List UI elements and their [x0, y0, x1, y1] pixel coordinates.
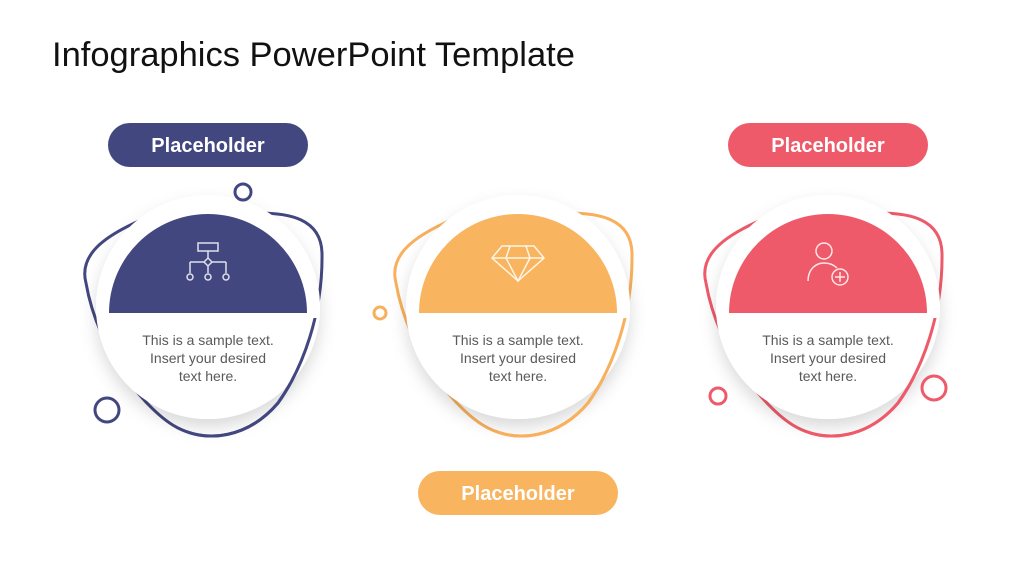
pill: bottom [418, 471, 618, 515]
text: text here. [489, 368, 547, 384]
title: Infographics PowerPoint Template [52, 36, 575, 74]
white circle [96, 195, 320, 419]
half disc [419, 214, 617, 313]
text: This is a sample text. [762, 332, 894, 348]
pill: bottom: Placeholder [461, 483, 575, 505]
text: Insert your desired [770, 350, 886, 366]
icon: hierarchy [187, 243, 229, 280]
icon: diamond [492, 246, 544, 281]
white circle [716, 195, 940, 419]
card: middle [395, 195, 632, 436]
pill: left [108, 123, 308, 167]
blob outline [395, 209, 632, 436]
half disc [109, 214, 307, 313]
decorative circles [95, 184, 946, 422]
blob outline [85, 209, 322, 436]
pill: right [728, 123, 928, 167]
text: This is a sample text. [452, 332, 584, 348]
card: left [85, 195, 322, 436]
pill: right: Placeholder [771, 135, 885, 157]
white circle [406, 195, 630, 419]
text: text here. [179, 368, 237, 384]
icon: add user [808, 243, 848, 285]
half disc [729, 214, 927, 313]
text: text here. [799, 368, 857, 384]
text: Insert your desired [150, 350, 266, 366]
pill: left: Placeholder [151, 135, 265, 157]
text: This is a sample text. [142, 332, 274, 348]
blob outline [705, 209, 942, 436]
text: Insert your desired [460, 350, 576, 366]
card: right [705, 195, 942, 436]
